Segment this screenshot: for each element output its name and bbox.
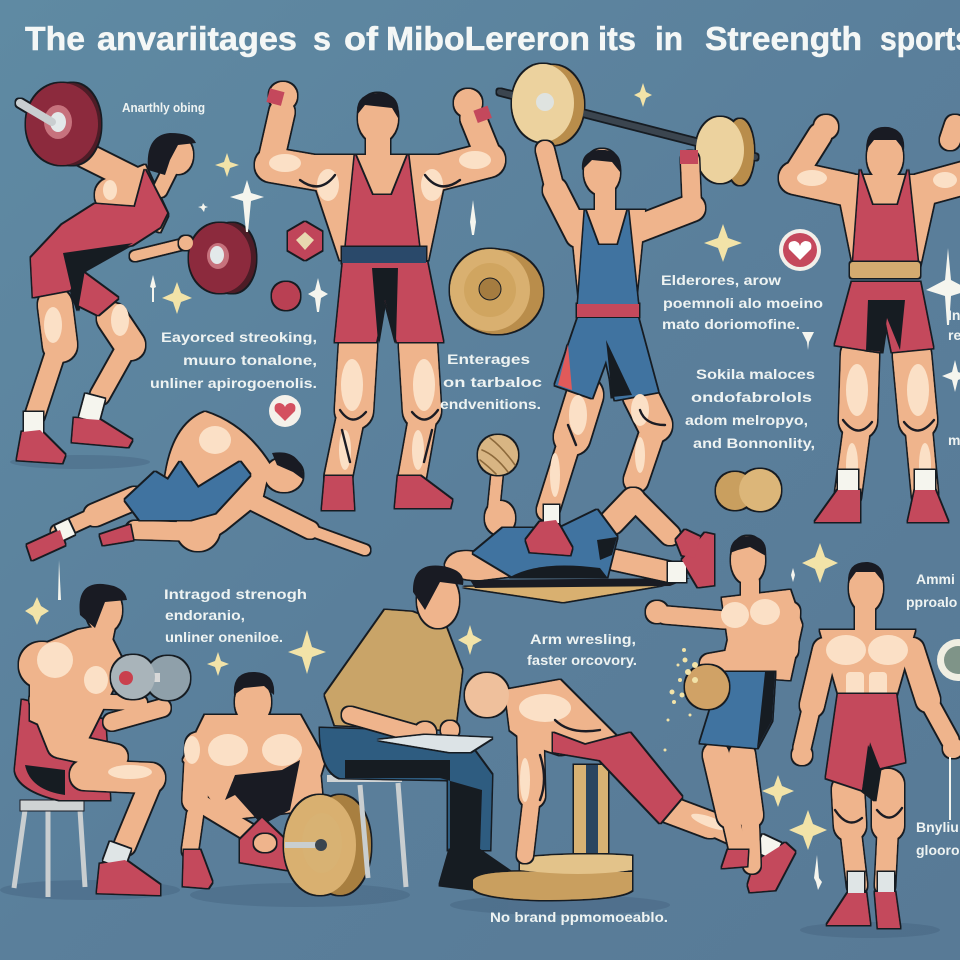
blue singlet bbox=[125, 462, 250, 520]
figure: seated dumbbell curler bbox=[14, 584, 190, 897]
shoes bbox=[27, 520, 133, 560]
figure: woman bent over with maroon barbell bbox=[17, 83, 256, 463]
sparkles bbox=[25, 83, 838, 850]
dark core bbox=[225, 760, 300, 825]
wrist bands bbox=[266, 88, 492, 123]
shoes bbox=[815, 470, 948, 522]
blue outfit bbox=[473, 510, 617, 577]
hand on bar bbox=[254, 834, 276, 852]
title: of bbox=[344, 20, 379, 57]
shoes bbox=[722, 850, 748, 868]
sweater bbox=[325, 610, 462, 730]
figure: bench lifter lying down bbox=[445, 435, 714, 602]
text: lower left benefit block: endoranio, bbox=[165, 607, 245, 623]
text: left benefit block bbox=[150, 329, 317, 391]
badge: red hexagon bbox=[288, 222, 322, 260]
text: right edge block upper: pproalo bbox=[906, 594, 957, 610]
leg creases bbox=[568, 410, 665, 445]
text: right benefit block one: poemnoli alo moeino bbox=[663, 295, 823, 311]
hair bbox=[413, 566, 463, 610]
title: its bbox=[598, 20, 636, 57]
text: right benefit block two: adom melropyo, bbox=[685, 412, 808, 428]
text: arm wrestling block: faster orcovory. bbox=[527, 652, 637, 668]
chair bbox=[327, 775, 406, 887]
shorts and belt bbox=[335, 247, 443, 342]
singlet and shorts bbox=[555, 210, 658, 400]
barbell bbox=[500, 64, 755, 185]
text: snatch label: Anarthly obing bbox=[122, 100, 205, 115]
text: right benefit block two: ondofabrolols bbox=[691, 389, 812, 405]
hair bbox=[866, 127, 904, 150]
text: right edge block upper: Ammi bbox=[916, 571, 955, 587]
gold plate bbox=[450, 249, 543, 334]
figure: seated man writing bbox=[320, 566, 510, 890]
shoes bbox=[322, 476, 452, 510]
skin bbox=[183, 679, 325, 850]
text: left benefit block: muuro tonalone, bbox=[183, 352, 317, 368]
figure: bald athlete push-up bbox=[465, 673, 795, 892]
muscle highlights bbox=[269, 151, 491, 470]
text: lower left benefit block: unliner oneniloe. bbox=[165, 629, 283, 645]
text: right edge block lower: Bnyliu bbox=[916, 819, 959, 835]
text: right edge block lower bbox=[916, 819, 960, 858]
highlight bbox=[199, 426, 231, 454]
gold plate with bar bbox=[284, 795, 371, 895]
stool bbox=[14, 800, 85, 897]
muscle highlights bbox=[797, 170, 957, 487]
creases bbox=[540, 720, 600, 800]
figure: crouching athlete with gold plate bbox=[183, 672, 371, 895]
text: lower left benefit block bbox=[164, 586, 307, 645]
badge: heart left bbox=[269, 395, 301, 427]
text: left benefit block: unliner apirogoenolis. bbox=[150, 375, 317, 391]
woman skin bbox=[35, 136, 193, 415]
maroon plate upper bbox=[20, 83, 101, 165]
shoes bbox=[440, 850, 510, 890]
skin bbox=[793, 115, 960, 495]
ball stripes bbox=[480, 438, 515, 474]
highlights bbox=[519, 694, 731, 834]
ball bbox=[685, 665, 729, 709]
text: centre benefit block: endvenitions. bbox=[440, 396, 541, 412]
post bbox=[574, 765, 608, 853]
hair bbox=[582, 150, 621, 172]
back shorts bbox=[15, 700, 110, 800]
gold plate stack bbox=[473, 854, 632, 900]
abs highlights bbox=[826, 635, 908, 696]
red shorts bbox=[553, 733, 682, 823]
hair bbox=[357, 93, 399, 118]
text: right benefit block one bbox=[661, 272, 823, 332]
creases bbox=[835, 808, 902, 822]
skin bbox=[465, 673, 765, 855]
singlet bbox=[345, 155, 420, 255]
figure: lying stretching athlete bbox=[27, 412, 365, 560]
text: right edge block upper bbox=[906, 571, 957, 610]
white sparkles bbox=[58, 180, 960, 890]
red shorts bbox=[826, 694, 905, 800]
title: s bbox=[313, 20, 331, 57]
text: centre benefit block: Enterages bbox=[447, 351, 530, 367]
text: clipped right edge labels bbox=[948, 307, 960, 448]
text: no brand note: No brand ppmomoeablo. bbox=[490, 909, 668, 925]
figure: far right flexing bodybuilder bbox=[793, 115, 960, 522]
sock and shoe bbox=[748, 835, 795, 892]
woman hair bbox=[148, 133, 196, 175]
muscle creases bbox=[300, 175, 460, 462]
maroon plate lower bbox=[179, 223, 256, 293]
skin bbox=[19, 587, 162, 845]
ball bbox=[478, 435, 518, 475]
title: Streength bbox=[705, 20, 862, 57]
hair bbox=[730, 536, 766, 556]
skin bbox=[58, 412, 365, 551]
pec highlights bbox=[184, 734, 302, 790]
text: arm wrestling block bbox=[527, 631, 637, 668]
floor shadows bbox=[0, 455, 940, 938]
badge: heart top right bbox=[779, 229, 821, 271]
skin bbox=[545, 149, 692, 510]
trousers bbox=[320, 728, 492, 850]
title: The bbox=[25, 20, 85, 57]
hair bbox=[848, 562, 884, 583]
skin bbox=[445, 475, 670, 580]
text: right benefit block one: mato doriomofine. bbox=[662, 316, 800, 332]
text: centre benefit block: on tarbaloc bbox=[443, 374, 542, 390]
text: right edge block lower: glooro bbox=[916, 842, 960, 858]
badge: grey right edge bbox=[937, 639, 960, 681]
blue shorts bbox=[700, 672, 775, 748]
text: lower left benefit block: Intragod strenogh bbox=[164, 586, 307, 602]
highlights bbox=[37, 642, 152, 779]
skin bbox=[269, 82, 490, 478]
shorts with belt bbox=[835, 262, 933, 352]
sock and shoe bbox=[97, 842, 160, 895]
text: arm wrestling block: Arm wresling, bbox=[530, 631, 636, 647]
forearm and hands bbox=[350, 572, 459, 744]
text: left benefit block: Eayorced streoking, bbox=[161, 329, 317, 345]
text: right benefit block two: and Bonnonlity, bbox=[693, 435, 815, 451]
skin bbox=[646, 536, 802, 865]
ball: red bbox=[272, 282, 300, 310]
muscle creases bbox=[843, 420, 934, 431]
hair bbox=[234, 672, 274, 695]
text: right benefit block two bbox=[685, 366, 815, 451]
title bbox=[25, 20, 960, 57]
text: right benefit block two: Sokila maloces bbox=[696, 366, 815, 382]
hair bbox=[272, 452, 304, 480]
figure: man with ball and blue shorts bbox=[646, 536, 802, 868]
pec highlights bbox=[721, 599, 780, 628]
skin bbox=[792, 564, 960, 885]
title: anvariitages bbox=[97, 20, 297, 57]
platform bbox=[463, 585, 663, 602]
notebook bbox=[378, 735, 492, 752]
woman shoes bbox=[17, 394, 132, 463]
hair bbox=[79, 584, 127, 628]
text: centre benefit block bbox=[440, 351, 542, 412]
figure: flexing bodybuilder in red singlet bbox=[266, 82, 492, 510]
singlet bbox=[853, 170, 918, 265]
gold balls pair bbox=[716, 469, 781, 511]
wrist band bbox=[680, 150, 698, 164]
text: right benefit block one: Elderores, arow bbox=[661, 272, 781, 288]
woman highlight bbox=[44, 180, 129, 343]
shoes bbox=[827, 872, 900, 928]
socks and shoes bbox=[526, 505, 714, 587]
dumbbell bbox=[111, 655, 190, 700]
sparkle dust bbox=[664, 648, 698, 752]
title: MiboLereron bbox=[386, 20, 590, 57]
leg highlights bbox=[550, 394, 649, 497]
figure: front-facing bodybuilder bottom right bbox=[792, 562, 960, 928]
figure: overhead barbell lifter in blue bbox=[500, 64, 755, 510]
woman singlet bbox=[31, 170, 167, 315]
dark bench shadow bbox=[470, 578, 690, 588]
title: in bbox=[655, 20, 683, 57]
shoes bbox=[183, 818, 288, 888]
